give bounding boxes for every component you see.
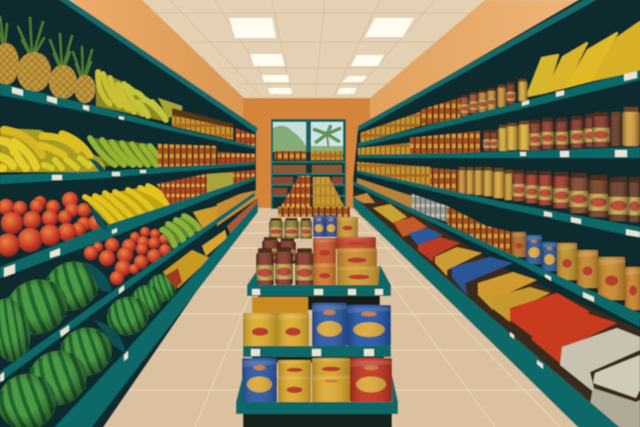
window with palm view (271, 119, 346, 209)
bananas second shelf (0, 128, 105, 172)
green bananas fourth shelf (160, 214, 202, 248)
top shelf back goods (269, 176, 358, 239)
right price tags (510, 71, 640, 369)
middle shelf goods (243, 297, 391, 347)
watermelons left upper (0, 254, 106, 365)
jars row one (360, 79, 528, 143)
left wall (65, 0, 244, 135)
jars row two (358, 107, 640, 157)
jars top shelf left (172, 108, 255, 146)
ceiling (0, 0, 640, 120)
jars row three (357, 162, 640, 222)
nectarines second bay (84, 227, 171, 285)
yellow bananas third shelf (84, 186, 170, 228)
middle gondola shelf (243, 346, 391, 363)
left shelf edges (0, 83, 258, 427)
pineapples (0, 17, 96, 103)
bottom gondola shelf (236, 375, 398, 427)
yellow snack bags (527, 22, 640, 96)
packaged goods bottom shelf (353, 192, 640, 427)
bananas top shelf (96, 70, 182, 122)
back wall shelving (271, 151, 346, 208)
top canopy edge (55, 0, 258, 133)
watermelons second bay (102, 270, 180, 341)
jars and cans row four (357, 178, 640, 310)
panel: left shelving (0, 0, 258, 427)
bay divider arcs (85, 158, 125, 353)
jars second shelf left (158, 144, 255, 167)
ceiling light panels (229, 18, 414, 94)
shelf back shadow (0, 0, 256, 427)
top canopy edge (358, 0, 600, 131)
nectarines left (0, 192, 104, 256)
pasta bags fourth shelf (193, 190, 258, 232)
top gondola shelf (247, 265, 391, 310)
back wall (243, 98, 370, 213)
right shelf edges (353, 70, 640, 427)
panel: right shelving (353, 0, 640, 427)
right wall (358, 0, 590, 128)
jars third shelf left (157, 170, 255, 205)
panel: center gondola (236, 176, 398, 427)
bags bottom shelf left (163, 198, 258, 288)
bottom shelf goods (242, 358, 392, 402)
top shelf front goods (256, 237, 381, 286)
green bananas (90, 138, 170, 166)
left price tags (0, 87, 146, 382)
tiled floor (80, 208, 590, 427)
shelf back shadow (353, 0, 640, 427)
watermelons left lower (0, 321, 119, 427)
